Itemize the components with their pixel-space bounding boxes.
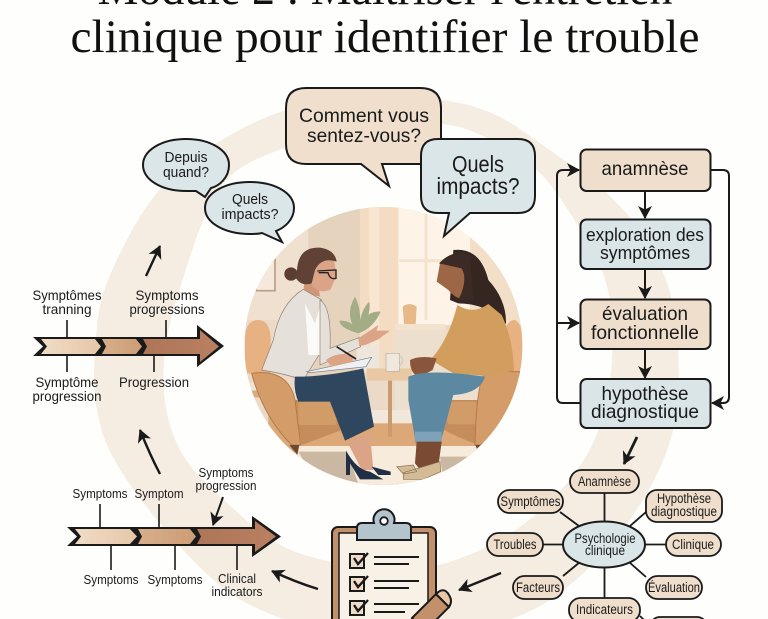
step: anamnèse: [580, 150, 710, 191]
speech bubble: Quels impacts small: impacts?: [222, 206, 278, 223]
plant: [339, 297, 381, 333]
speech bubble: Depuis quand: quand?: [163, 164, 209, 181]
timeline: bottom: Symptom: [134, 486, 184, 501]
timeline: top: Symptôme: [36, 374, 99, 390]
illustration: clinical interview scene: [240, 200, 532, 490]
timeline: top: tranning: [42, 301, 92, 317]
clip: [357, 509, 411, 540]
arrow: clipboard to timeline: [272, 571, 318, 589]
node: Hypothèse diagnostique: diagnostique: [651, 504, 717, 519]
node: clipped: [650, 617, 707, 619]
speech bubble: Quels impacts small: Quels: [232, 191, 268, 208]
timeline: top: progressions: [130, 301, 204, 317]
node: Symptômes: [498, 490, 563, 513]
timeline: bottom: [67, 465, 281, 599]
connector arrows: [557, 170, 729, 403]
arrow: flowchart to mind map: [624, 437, 637, 464]
step: évaluation: fonctionnelle: [591, 322, 699, 344]
patient: [397, 250, 514, 479]
step: exploration: [580, 220, 710, 269]
node: Symptômes: Symptômes: [500, 494, 561, 509]
node: Troubles: Troubles: [494, 537, 537, 552]
arrow: to timeline progression: [213, 497, 223, 525]
step: exploration: exploration des: [586, 224, 704, 245]
timeline: bottom: Symptoms: [72, 486, 128, 501]
step: anamnèse: anamnèse: [602, 158, 688, 180]
node: Anamnèse: [570, 470, 639, 493]
timeline: bottom: Symptoms: [198, 465, 254, 480]
node: Évaluation: Évaluation: [648, 580, 700, 595]
timeline: top: Symptômes: [32, 287, 102, 303]
step: évaluation: évaluation: [602, 303, 688, 325]
right armchair: [506, 320, 522, 376]
speech bubble: Depuis quand: [143, 139, 229, 197]
clipboard: [332, 509, 451, 619]
mind map: [487, 470, 722, 619]
flowchart: [557, 150, 729, 428]
arrow: up between timelines: [140, 430, 160, 474]
timeline: bottom: indicators: [212, 584, 263, 599]
timeline: top: Symptoms: [136, 287, 198, 303]
node: centre: clinique: [585, 543, 625, 558]
left armchair: [245, 320, 271, 373]
speech bubble: Comment vous sentez-vous: sentez-vous?: [307, 126, 421, 147]
timeline: top: [32, 287, 224, 404]
speech bubble: Quels impacts large: [421, 139, 535, 236]
timeline: bottom: progression: [196, 478, 256, 493]
node: Facteurs: [513, 576, 563, 599]
timeline: bottom: Symptoms: [148, 572, 203, 587]
speech bubble: Depuis quand: Depuis: [164, 149, 208, 166]
arrow: up to bubbles: [146, 246, 160, 276]
node: Indicateurs: Indicateurs: [576, 602, 633, 617]
left side table: [252, 390, 274, 430]
node: Troubles: [487, 533, 543, 556]
node: Facteurs: Facteurs: [516, 580, 560, 595]
speech bubble: Quels impacts large: impacts?: [436, 173, 520, 199]
node: Hypothèse diagnostique: Hypothèse: [657, 491, 711, 506]
node: Clinique: [666, 533, 721, 556]
node: Hypothèse diagnostique: [646, 490, 722, 522]
timeline: bottom: Clinical: [218, 571, 256, 586]
timeline: top: progression: [32, 388, 102, 404]
node: centre: Psychologie: [574, 531, 636, 546]
step: hypothèse: diagnostique: [591, 401, 699, 423]
side table: [367, 368, 412, 381]
checklist: [350, 554, 364, 615]
speech bubble: Quels impacts small: [205, 182, 294, 242]
node: centre: [563, 522, 645, 568]
node: Anamnèse: Anamnèse: [578, 474, 631, 489]
step: exploration: symptômes: [600, 242, 690, 263]
node: Évaluation: [646, 576, 702, 599]
step: évaluation: [580, 300, 710, 349]
speech bubble: Comment vous sentez-vous: Comment vous: [299, 106, 429, 127]
pencil: [412, 594, 449, 619]
title: clinique pour identifier le trouble: [70, 11, 699, 63]
step: hypothèse: [580, 379, 710, 428]
speech bubble: Comment vous sentez-vous: [286, 88, 441, 186]
node: Clinique: Clinique: [672, 537, 714, 552]
timeline: top: Progression: [119, 374, 189, 390]
step: hypothèse: hypothèse: [602, 383, 688, 405]
node: Indicateurs: [569, 598, 640, 619]
therapist: [262, 248, 391, 479]
background ring: [94, 96, 679, 619]
arrow: mind map to clipboard: [459, 573, 501, 590]
timeline: bottom: Symptoms: [84, 572, 139, 587]
speech bubble: Quels impacts large: Quels: [452, 151, 504, 177]
